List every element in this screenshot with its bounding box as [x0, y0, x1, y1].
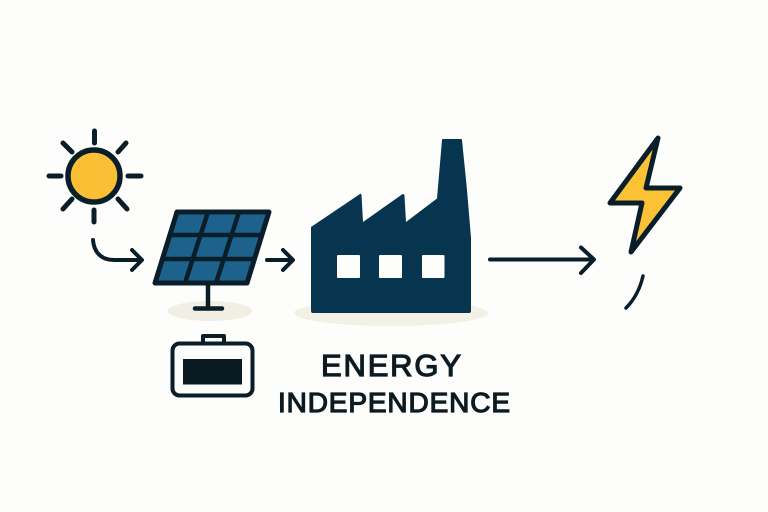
- arrow: sun to solar panel: [93, 240, 142, 270]
- factory silhouette: [311, 139, 471, 313]
- icon: sun: [49, 131, 141, 222]
- arrow: solar panel to factory: [267, 250, 293, 270]
- title: energy independence: INDEPENDENCE: [278, 387, 510, 418]
- battery charge level: [183, 359, 242, 384]
- panel stand: [195, 284, 222, 308]
- icon: solar panel: [155, 212, 269, 321]
- panel grid: [162, 212, 262, 283]
- title: energy independence: ENERGY: [321, 348, 461, 383]
- arrow: factory to lightning bolt: [490, 248, 594, 273]
- icon: lightning bolt: [610, 138, 680, 252]
- factory ground shadow: [294, 300, 488, 326]
- curved accent stroke below bolt: [626, 276, 643, 308]
- factory windows: [337, 255, 444, 278]
- panel ground shadow: [168, 301, 252, 321]
- panel cells: [155, 212, 269, 283]
- icon: battery: [172, 336, 252, 396]
- icon: factory: [294, 139, 488, 326]
- title: energy independence: [278, 348, 510, 418]
- battery terminal: [203, 336, 224, 343]
- battery body: [172, 344, 252, 396]
